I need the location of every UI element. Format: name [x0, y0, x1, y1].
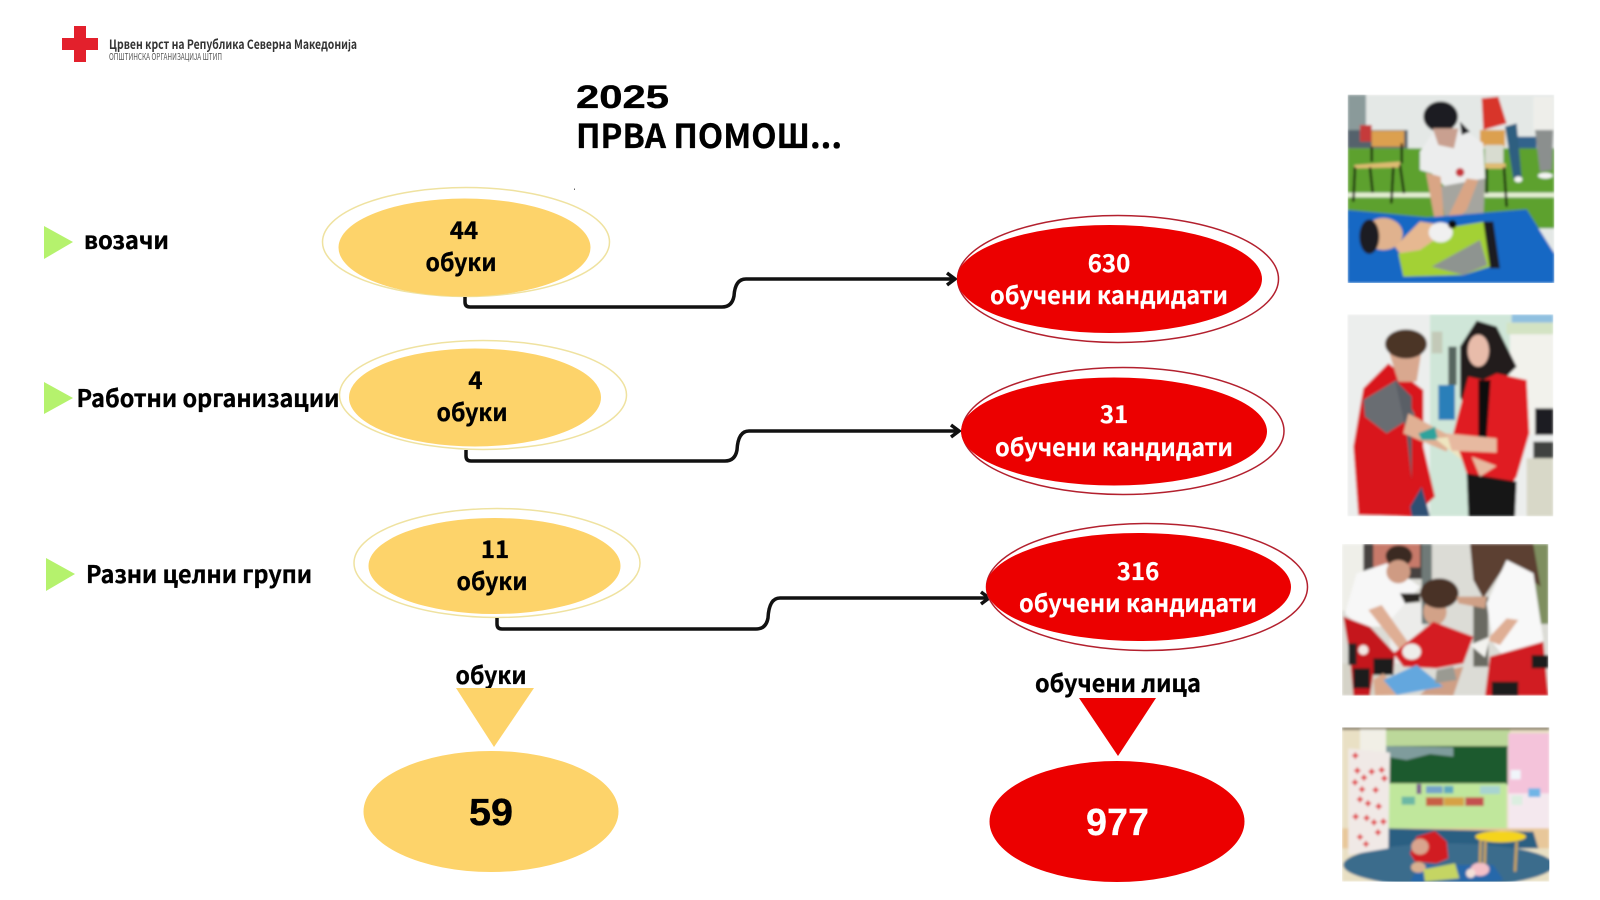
candidates oval 316: обучени кандидати [1019, 584, 1257, 619]
trainings oval 11: обуки [456, 562, 528, 597]
trainings oval 4: 4 [468, 361, 483, 396]
photo: first aid demonstration on stage [1342, 727, 1553, 887]
label: work organisations: Работни организации [76, 379, 340, 414]
icon: green triangle [44, 382, 73, 414]
photo: bandaging an arm [1347, 314, 1553, 516]
trainings oval 4: обуки [436, 393, 508, 428]
candidates oval 316 [986, 524, 1308, 650]
label: drivers: возачи [84, 221, 169, 256]
arrow: red triangle [1079, 698, 1156, 756]
candidates oval 630: обучени кандидати [990, 276, 1228, 311]
candidates oval 630 [957, 216, 1278, 342]
row 2: work organisations [44, 340, 1284, 494]
small dot [574, 188, 575, 190]
arrow connector [466, 425, 959, 461]
icon: green triangle [46, 558, 75, 591]
candidates oval 31 [961, 368, 1284, 494]
candidates oval 31: обучени кандидати [995, 428, 1233, 463]
trainings oval 4 [340, 340, 626, 450]
photo: CPR on training mannequin [1348, 95, 1554, 283]
total oval 59: 59 [469, 792, 513, 834]
total oval 59 [364, 751, 618, 872]
trainings oval 11 [354, 508, 640, 618]
logo: Red Cross organisation [62, 26, 357, 63]
photo: volunteers treating a boy [1342, 544, 1548, 696]
arrow: yellow triangle [456, 688, 534, 747]
icon: green triangle [44, 226, 73, 259]
total oval 977 [990, 761, 1244, 882]
icon: red cross [62, 26, 98, 62]
label: trained people: обучени лица [1035, 664, 1201, 699]
logo subtitle: ОПШТИНСКА ОРГАНИЗАЦИЈА ШТИП [109, 50, 222, 63]
total oval 977: 977 [1086, 802, 1149, 844]
title: ПРВА ПОМОШ... [576, 110, 842, 158]
title: 2025 [576, 79, 669, 115]
logo name: Црвен крст на Република Северна Македонија [109, 34, 357, 53]
total trained people [990, 664, 1244, 882]
trainings oval 44: 44 [450, 211, 478, 246]
trainings oval 44: обуки [426, 243, 496, 278]
candidates oval 31: 31 [1100, 395, 1128, 430]
trainings oval 44 [322, 188, 610, 296]
row 1: drivers [44, 188, 1278, 342]
trainings oval 11: 11 [481, 530, 509, 565]
arrow connector [465, 273, 955, 307]
arrow connector [497, 592, 989, 629]
total trainings [364, 656, 618, 872]
label: various target groups: Разни целни групи [86, 555, 312, 590]
candidates oval 316: 316 [1117, 552, 1159, 587]
row 3: various target groups [46, 508, 1308, 650]
label: trainings: обуки [456, 656, 526, 691]
candidates oval 630: 630 [1088, 244, 1130, 279]
title [576, 79, 842, 158]
